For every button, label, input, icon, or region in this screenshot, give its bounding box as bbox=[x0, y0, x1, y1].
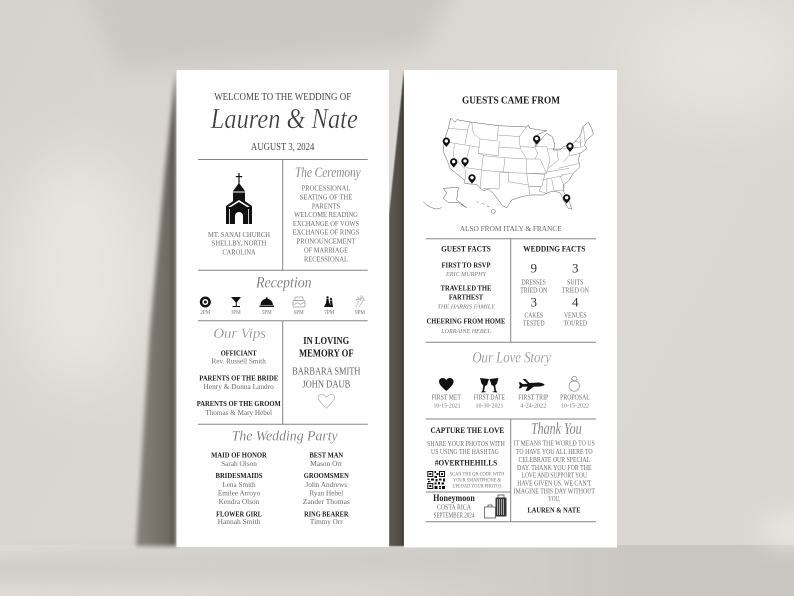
love story milestones: 10-15-2022 bbox=[561, 404, 589, 410]
stat: dresses tried on bbox=[520, 260, 547, 294]
thank you message: TO HAVE YOU ALL HERE TO bbox=[516, 448, 593, 456]
honeymoon details: COSTA RICA bbox=[437, 504, 471, 512]
stat: suits tried on: TRIED ON bbox=[562, 286, 589, 294]
qr instructions: SCAN THE QR CODE WITH bbox=[450, 472, 505, 477]
memorial heading bbox=[299, 336, 354, 359]
stat: venues toured: VENUES bbox=[564, 312, 587, 320]
stat: dresses tried on: DRESSES bbox=[522, 279, 546, 287]
bride's side list: Sarah Olson bbox=[221, 460, 257, 468]
heading: capture the love: CAPTURE THE LOVE bbox=[430, 426, 504, 435]
qr instructions: YOUR SMARTPHONE & bbox=[453, 478, 501, 483]
vip names: Thomas & Mary Hebel bbox=[205, 409, 272, 417]
panel: capture the love bbox=[427, 426, 505, 490]
heading: our vips: Our Vips bbox=[213, 326, 266, 342]
stat: suits tried on: 3 bbox=[572, 260, 579, 275]
panel: honeymoon bbox=[433, 493, 506, 519]
hashtag: #OVERTHEHILLS bbox=[435, 459, 498, 468]
groom's side list: John Andrews bbox=[305, 481, 347, 489]
guest facts list: ERIC MURPHY bbox=[445, 271, 487, 278]
guest facts list bbox=[427, 261, 506, 335]
stat: suits tried on: SUITS bbox=[567, 279, 584, 287]
love story milestones bbox=[432, 394, 590, 410]
venue address: MT. SANAI CHURCH bbox=[208, 231, 270, 239]
signature: LAUREN & NATE bbox=[528, 506, 581, 514]
bride's side list: MAID OF HONOR bbox=[211, 451, 268, 459]
stat: venues toured: 4 bbox=[572, 294, 579, 309]
thank you message: LOVE AND SUPPORT YOU bbox=[522, 472, 587, 480]
love story milestones: FIRST TRIP bbox=[518, 394, 548, 402]
thank you message: HAVE GIVEN US. WE CAN'T bbox=[517, 480, 592, 488]
love story milestones: FIRST MET bbox=[432, 394, 462, 402]
bride's side list: Lena Smith bbox=[222, 481, 256, 489]
love story milestones: 4-24-2022 bbox=[520, 404, 546, 410]
memorial heading: IN LOVING bbox=[303, 336, 349, 347]
hashtag instructions bbox=[427, 440, 505, 456]
thank you message: IMAGINE THIS DAY WITHOUT bbox=[514, 488, 596, 496]
bride's side list: Emilee Arroyo bbox=[218, 489, 261, 497]
heading: thank you: Thank You bbox=[531, 419, 582, 438]
icon: camera at 2pm bbox=[200, 296, 211, 308]
vip names: PARENTS OF THE GROOM bbox=[197, 400, 281, 408]
panel: guest facts bbox=[427, 245, 506, 335]
love story milestones: PROPOSAL bbox=[560, 394, 590, 402]
icon: outline heart bbox=[318, 394, 335, 408]
groom's side list: GROOMSMEN bbox=[304, 472, 349, 480]
guest facts list: CHEERING FROM HOME bbox=[427, 317, 506, 325]
hashtag instructions: SHARE YOUR PHOTOS WITH bbox=[427, 440, 505, 448]
venue address: CAROLINA bbox=[222, 249, 256, 257]
love story milestones: 10-15-2021 bbox=[434, 404, 460, 410]
caption: also from italy and france: ALSO FROM ITALY & FRANCE bbox=[460, 224, 562, 233]
stat: venues toured: TOURED bbox=[563, 320, 587, 328]
heading: guest facts: GUEST FACTS bbox=[441, 245, 491, 254]
love story milestones: FIRST DATE bbox=[474, 394, 505, 402]
card: wedding program back bbox=[404, 70, 617, 548]
memorial names: BARBARA SMITH bbox=[292, 367, 360, 378]
icon: cocktail at 3pm bbox=[231, 297, 241, 307]
shadow left of first card bbox=[136, 72, 176, 546]
stat: cakes tested bbox=[523, 294, 545, 328]
ceremony order list: SEATING OF THE bbox=[300, 194, 352, 202]
icon: cloche at 5pm bbox=[260, 297, 274, 307]
memorial heading: MEMORY OF bbox=[299, 348, 354, 359]
reception times: 3PM bbox=[231, 310, 241, 316]
panel: the ceremony bbox=[293, 165, 361, 263]
icon: airplane bbox=[519, 379, 544, 391]
groom's side list: Mason Orr bbox=[310, 460, 343, 468]
program grid lines bbox=[198, 160, 368, 424]
guest facts list: FARTHEST bbox=[449, 293, 483, 301]
heading: honeymoon: Honeymoon bbox=[433, 493, 475, 503]
bride's side list: Kendra Olson bbox=[219, 498, 260, 506]
bride's side list bbox=[211, 451, 268, 526]
reception times: 7PM bbox=[324, 310, 335, 316]
stat: cakes tested: TESTED bbox=[523, 320, 545, 328]
title: welcome line: WELCOME TO THE WEDDING OF bbox=[214, 92, 352, 103]
thank you message: CELEBRATE OUR SPECIAL bbox=[518, 456, 590, 464]
ceremony order list: EXCHANGE OF RINGS bbox=[293, 229, 359, 237]
heading: wedding facts: WEDDING FACTS bbox=[523, 245, 586, 254]
shadow between the cards bbox=[389, 70, 404, 546]
bride's side list: BRIDESMAIDS bbox=[216, 472, 263, 480]
ceremony order list: PROCESSIONAL bbox=[302, 185, 350, 193]
groom's side list: Ryan Hebel bbox=[309, 489, 343, 497]
groom's side list: BEST MAN bbox=[309, 451, 343, 459]
ceremony order list: PARENTS bbox=[312, 202, 340, 210]
map pins bbox=[443, 135, 574, 204]
stat: dresses tried on: TRIED ON bbox=[520, 286, 547, 294]
qr instructions: UPLOAD YOUR PHOTOS bbox=[452, 485, 502, 490]
groom's side list: Zander Thomas bbox=[303, 498, 350, 506]
heading: the ceremony: The Ceremony bbox=[295, 165, 361, 181]
stat: suits tried on bbox=[562, 260, 589, 294]
vip names: Henry & Donna Landro bbox=[204, 383, 274, 391]
panel: reception timeline bbox=[200, 275, 366, 316]
honeymoon details: SEPTEMBER 2024 bbox=[434, 511, 475, 519]
thank you message: IT MEANS THE WORLD TO US bbox=[514, 440, 595, 448]
icon: diamond ring bbox=[569, 376, 580, 391]
icon: heart bbox=[439, 378, 454, 391]
venue address: SHELLBY, NORTH bbox=[212, 240, 266, 248]
groom's side list bbox=[303, 451, 350, 526]
groom's side list: Timmy Orr bbox=[310, 518, 343, 526]
reception times bbox=[200, 310, 366, 316]
card: wedding program front bbox=[176, 70, 389, 547]
hashtag instructions: US USING THE HASHTAG bbox=[431, 448, 499, 456]
guest facts list: FIRST TO RSVP bbox=[442, 261, 491, 269]
bride's side list: FLOWER GIRL bbox=[216, 510, 262, 518]
ceremony order list: OF MARRIAGE bbox=[304, 247, 348, 255]
panel: church venue bbox=[208, 173, 270, 257]
panel: our love story bbox=[432, 350, 590, 410]
reception times: 9PM bbox=[355, 310, 366, 316]
map: united states with guest pins bbox=[423, 118, 593, 213]
icon: sparklers at 9pm bbox=[356, 295, 365, 307]
ceremony order list: RECESSIONAL bbox=[304, 255, 348, 263]
reception times: 6PM bbox=[294, 310, 304, 316]
ceremony order list bbox=[293, 185, 359, 263]
icon: dancing couple at 7pm bbox=[324, 296, 333, 307]
love story milestones: 10-30-2021 bbox=[476, 404, 504, 410]
stat: dresses tried on: 9 bbox=[530, 260, 537, 275]
guest facts list: TRAVELED THE bbox=[441, 285, 492, 293]
memorial names: JOHN DAUB bbox=[302, 379, 351, 390]
ceremony order list: EXCHANGE OF VOWS bbox=[293, 220, 359, 228]
thank you message: YOU. bbox=[548, 495, 561, 503]
panel: the wedding party bbox=[211, 429, 350, 526]
back grid lines bbox=[426, 239, 596, 522]
guest facts list: THE HARRIS FAMILY bbox=[437, 304, 496, 311]
stat: cakes tested: 3 bbox=[530, 294, 537, 309]
memorial names bbox=[292, 367, 360, 390]
panel: thank you bbox=[514, 419, 596, 514]
vip names bbox=[197, 349, 281, 417]
ceremony order list: PRONOUNCEMENT bbox=[297, 238, 356, 246]
panel: wedding facts bbox=[520, 245, 589, 328]
bride's side list: Hannah Smith bbox=[218, 518, 261, 526]
vip names: PARENTS OF THE BRIDE bbox=[199, 375, 279, 383]
thank you message: DAY. THANK YOU FOR THE bbox=[517, 464, 592, 472]
icon: cake at 6pm bbox=[293, 297, 305, 307]
wedding date: AUGUST 3, 2024 bbox=[251, 142, 314, 153]
guest facts list: LORRAINE HEBEL bbox=[440, 328, 491, 335]
map outline and state borders bbox=[443, 118, 593, 209]
icon: luggage bbox=[484, 495, 506, 518]
vip names: Rev. Russell Smith bbox=[212, 358, 266, 366]
icon: qr code bbox=[427, 471, 445, 489]
panel: in loving memory bbox=[292, 336, 360, 408]
heading: guests came from: GUESTS CAME FROM bbox=[462, 96, 561, 107]
reception times: 2PM bbox=[200, 310, 211, 316]
heading: reception: Reception bbox=[255, 275, 312, 292]
reception times: 5PM bbox=[262, 310, 272, 316]
ceremony order list: WELCOME READING bbox=[294, 211, 358, 219]
icon: church bbox=[226, 173, 252, 224]
thank you message bbox=[514, 440, 596, 503]
heading: the wedding party: The Wedding Party bbox=[232, 429, 338, 445]
stat: cakes tested: CAKES bbox=[525, 312, 543, 320]
icon: champagne glasses bbox=[480, 378, 498, 392]
venue address bbox=[208, 231, 270, 257]
qr instructions bbox=[450, 472, 505, 490]
vip names: OFFICIANT bbox=[221, 349, 257, 357]
map: alaska and hawaii insets bbox=[423, 187, 495, 213]
groom's side list: RING BEARER bbox=[304, 510, 349, 518]
heading: our love story: Our Love Story bbox=[472, 350, 552, 367]
panel: our vips bbox=[197, 326, 281, 417]
title: couple names in script: Lauren & Nate bbox=[210, 103, 358, 135]
stat: venues toured bbox=[563, 294, 587, 328]
honeymoon details bbox=[434, 504, 475, 519]
